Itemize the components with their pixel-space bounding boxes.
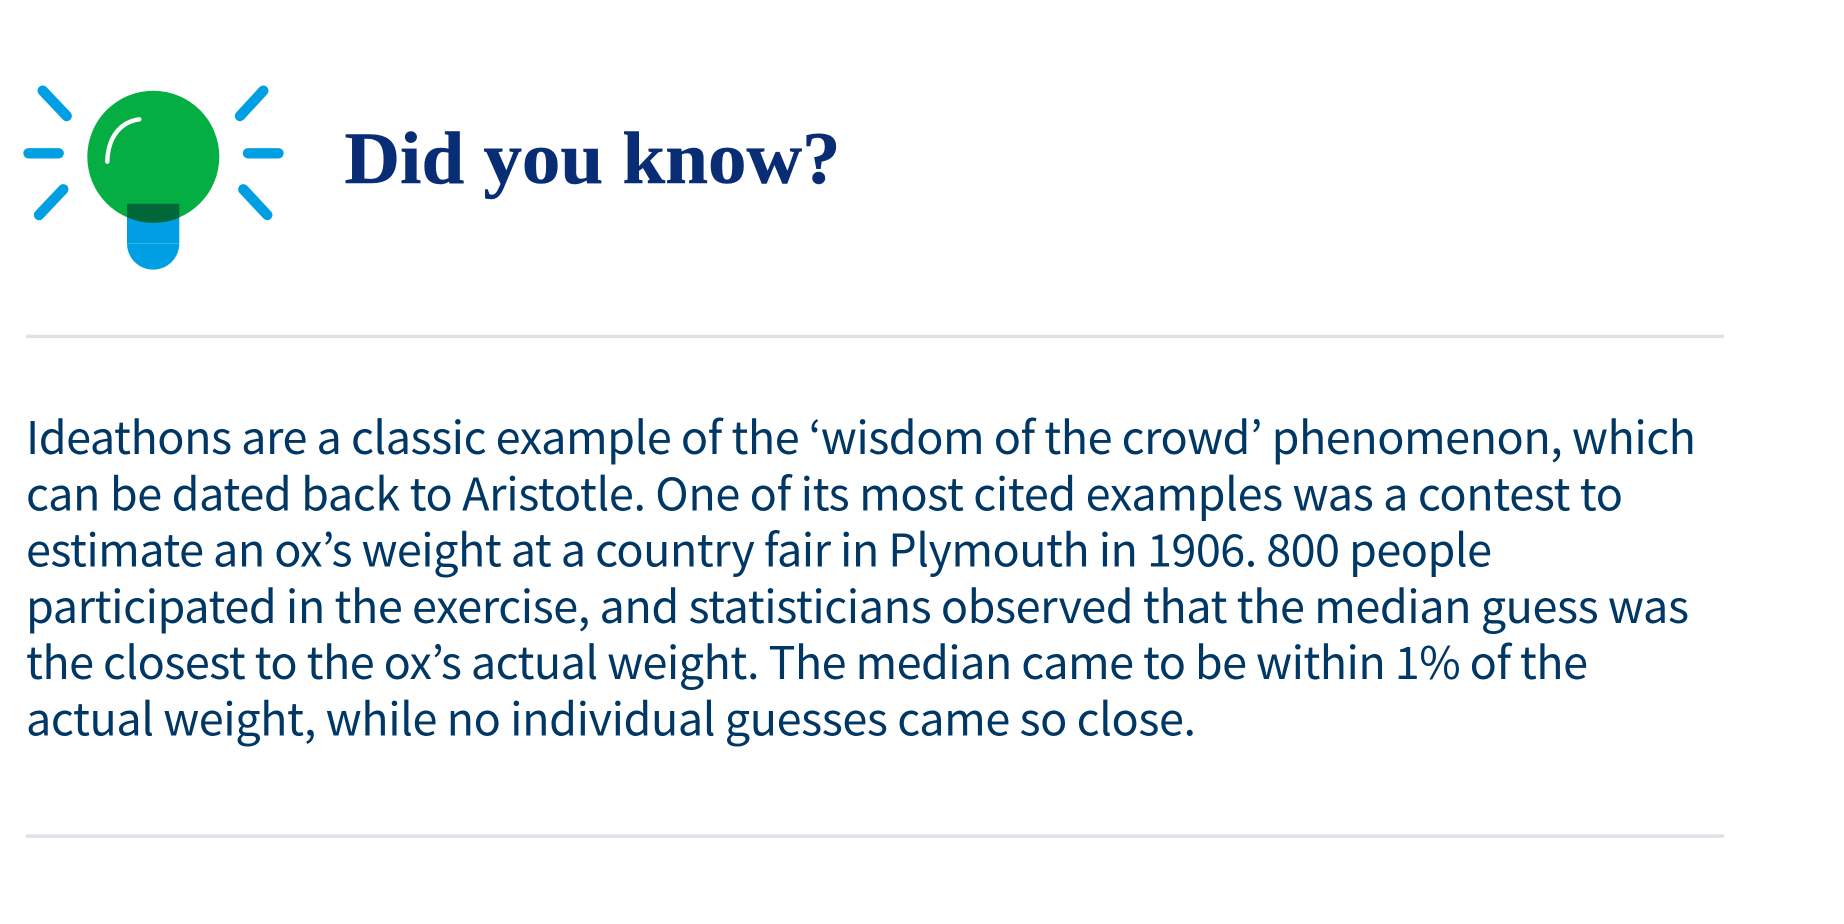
title: Did you know? bbox=[344, 118, 840, 200]
bulb base bbox=[127, 204, 179, 270]
bulb base overlap bbox=[127, 204, 179, 223]
body text: Ideathons are a classic example of the ‘wisdom of the crowd’ phenomenon, which bbox=[26, 402, 1696, 467]
body text: estimate an ox’s weight at a country fair in Plymouth in 1906. 800 people bbox=[26, 515, 1492, 580]
top divider bbox=[26, 335, 1724, 338]
icon: light bulb bbox=[28, 91, 278, 270]
body text: can be dated back to Aristotle. One of its most cited examples was a contest to bbox=[26, 458, 1623, 523]
body text: actual weight, while no individual guesses came so close. bbox=[26, 684, 1196, 748]
bottom divider bbox=[26, 834, 1724, 838]
body text: participated in the exercise, and statisticians observed that the median guess was bbox=[26, 571, 1689, 636]
bulb base seam bbox=[127, 243, 179, 244]
icon rays bbox=[28, 91, 278, 215]
bulb glass bbox=[87, 91, 219, 223]
body text: the closest to the ox’s actual weight. The median came to be within 1% of the bbox=[26, 627, 1588, 692]
bulb highlight bbox=[107, 119, 139, 162]
body text bbox=[26, 402, 1696, 748]
